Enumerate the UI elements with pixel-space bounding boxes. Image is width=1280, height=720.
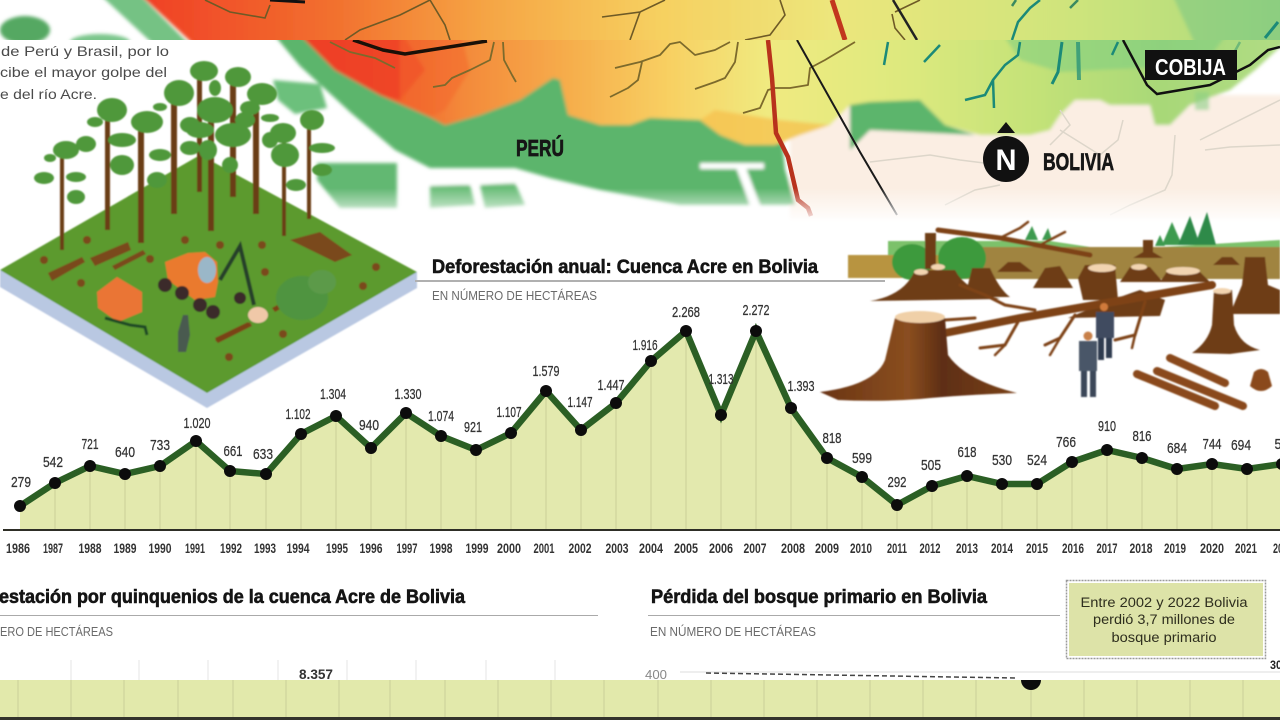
chart value labels: 684	[1167, 440, 1187, 457]
panel gridlines	[71, 660, 555, 680]
intro text block: e del río Acre.	[0, 86, 97, 102]
chart value labels: 910	[1098, 418, 1116, 435]
point fragment	[1021, 680, 1041, 690]
chart value labels: 599	[852, 450, 872, 467]
chart year axis labels: 1995	[326, 540, 348, 556]
chart year axis labels: 1999	[466, 540, 489, 556]
chart value labels: 1.074	[428, 408, 454, 425]
distant vegetation	[888, 212, 1280, 262]
chart line	[20, 331, 1280, 506]
panel subtitle: EN NÚMERO DE HECTÁREAS	[650, 624, 816, 639]
map teal streams	[884, 42, 1240, 108]
chart value labels: 1.447	[598, 377, 624, 394]
log pile	[1137, 358, 1243, 406]
big stump	[820, 311, 1017, 401]
bottom band: chart fragment	[0, 680, 1280, 720]
chart year axis labels: 1986	[6, 540, 30, 556]
chart year axis labels: 2020	[1200, 540, 1224, 556]
chart value labels: 633	[253, 446, 273, 463]
harvester machine	[158, 246, 254, 319]
chart year axis labels: 2003	[606, 540, 629, 556]
chart value labels: 940	[359, 417, 379, 434]
chart value labels	[11, 302, 1280, 491]
chart year axis labels: 1988	[78, 540, 102, 556]
chart value labels: 721	[82, 436, 98, 453]
chart year axis labels: 2007	[744, 540, 767, 556]
chart year axis labels: 1990	[148, 540, 172, 556]
felled tree	[215, 270, 336, 343]
chart year axis labels: 1992	[220, 540, 242, 556]
chart value labels: 766	[1056, 434, 1076, 451]
panel heading: Pérdida del bosque primario en Bolivia	[651, 587, 987, 608]
chart year axis labels: 1987	[43, 540, 63, 556]
chart year axis labels: 2005	[674, 540, 698, 556]
callout	[1066, 580, 1266, 658]
chart value labels: 1.579	[532, 363, 560, 380]
stumps and logs	[40, 232, 380, 361]
chart year axis labels: 2021	[1235, 540, 1257, 556]
chart value labels: 1.102	[286, 406, 310, 423]
chart value labels: 1.304	[320, 386, 346, 403]
chart value labels: 542	[43, 454, 63, 471]
map strip at top	[0, 0, 1280, 40]
chart value labels: 733	[150, 437, 170, 454]
chart value labels: 921	[464, 419, 482, 436]
map rivers	[330, 42, 855, 113]
worker	[178, 315, 190, 352]
map diagonal black border	[797, 40, 897, 215]
chart value labels: 1.330	[394, 386, 422, 403]
rear stumps	[870, 233, 1280, 354]
stump tops	[914, 264, 1231, 294]
map Bolivian rivers	[870, 100, 1280, 215]
chart year axis labels: 1996	[360, 540, 383, 556]
chart year axis labels: 2011	[887, 540, 907, 556]
person 2	[1079, 332, 1097, 397]
chart year axis labels: 2008	[781, 540, 805, 556]
chart: annual deforestation	[3, 257, 1280, 556]
intro text block	[0, 43, 169, 102]
ground band	[960, 247, 1280, 279]
chart year axis labels: 2004	[639, 540, 663, 556]
panel subtitle: ERO DE HECTÁREAS	[0, 624, 113, 639]
plot ground	[0, 155, 417, 393]
chart value labels: 1.393	[788, 378, 814, 395]
bar value: 8.357	[299, 666, 333, 682]
chart value labels: 744	[1202, 436, 1222, 453]
intro text block: cibe el mayor golpe del	[0, 64, 167, 80]
chart value labels: 2.268	[672, 304, 700, 321]
chart gridlines	[55, 331, 1247, 530]
panel: primary forest loss	[645, 587, 1280, 682]
callout: perdió 3,7 millones de	[1093, 612, 1235, 627]
chart value labels: 530	[992, 452, 1012, 469]
chart value labels: 524	[1027, 452, 1047, 469]
chart value labels: 818	[822, 430, 842, 447]
chart year axis labels: 2018	[1130, 540, 1153, 556]
map black thick road	[353, 40, 487, 54]
chart value labels: 1.916	[632, 337, 658, 354]
chart year axis labels: 1989	[114, 540, 137, 556]
panel heading: estación por quinquenios de la cuenca Acre de Bolivia	[0, 587, 465, 608]
trailer	[97, 277, 147, 335]
icon: north compass	[983, 122, 1029, 182]
chart year axis labels: 2009	[815, 540, 839, 556]
axis value: 400	[645, 667, 667, 682]
chart year axis labels: 2010	[850, 540, 872, 556]
illustration: logging plot	[0, 61, 417, 408]
chart year axis labels: 2012	[920, 540, 941, 556]
band gridlines	[18, 680, 1243, 717]
chart value labels: 1.313	[708, 371, 734, 388]
map red border	[768, 40, 811, 216]
chart year axis labels: 1998	[430, 540, 453, 556]
chart value labels: 292	[888, 474, 906, 491]
chart year axis labels: 2013	[956, 540, 978, 556]
chart area	[20, 331, 1280, 530]
fallen tree trunks	[938, 222, 1212, 355]
chart year axis labels: 2006	[709, 540, 733, 556]
callout: bosque primario	[1112, 630, 1216, 645]
intro text block: de Perú y Brasil, por lo	[1, 43, 169, 59]
chart year axis labels: 1991	[185, 540, 205, 556]
tree crowns	[34, 61, 335, 204]
chart axis	[3, 529, 1280, 531]
chart year axis labels: 2015	[1026, 540, 1048, 556]
chart points	[14, 325, 1280, 512]
panel: five-year deforestation	[0, 587, 598, 682]
icon: north compass: N	[996, 144, 1016, 177]
chart value labels: 505	[921, 457, 941, 474]
map Cobija road	[1123, 40, 1280, 94]
chart year axis labels: 2017	[1096, 540, 1118, 556]
map terrain	[271, 40, 1280, 217]
chart value labels: 694	[1231, 437, 1251, 454]
label: Bolivia: BOLIVIA	[1043, 149, 1114, 176]
chart value labels: 2.272	[742, 302, 770, 319]
chart year axis labels: 2001	[534, 540, 555, 556]
chart year axis labels: 2002	[568, 540, 592, 556]
map panel: topographic map of the Acre basin	[0, 0, 1280, 224]
label: Cobija: COBIJA	[1155, 54, 1226, 80]
chart year axis labels	[6, 540, 1280, 556]
dashed line	[706, 673, 1015, 678]
chart year axis labels: 1993	[254, 540, 276, 556]
person 1	[1096, 303, 1114, 360]
chart year axis labels: 1994	[286, 540, 310, 556]
chart value labels: 1.107	[496, 404, 522, 421]
chart year axis labels: 2000	[497, 540, 521, 556]
chart subtitle: EN NÚMERO DE HECTÁREAS	[432, 288, 597, 303]
chart year axis labels: 2014	[991, 540, 1013, 556]
bushes	[892, 237, 986, 280]
chart year axis labels: 2019	[1164, 540, 1186, 556]
plot base	[0, 270, 417, 408]
chart value labels: 816	[1132, 428, 1152, 445]
strip rivers	[205, 0, 920, 40]
chart value labels: 279	[11, 474, 31, 491]
chart value labels: 661	[224, 443, 242, 460]
chart value labels: 1.147	[568, 394, 592, 411]
illustration: deforested landscape	[820, 212, 1280, 406]
chart heading: Deforestación anual: Cuenca Acre en Bolivia	[432, 257, 818, 278]
strip thick road and borders	[270, 0, 305, 2]
chart value labels: 1.020	[184, 415, 210, 432]
chart year axis labels: 1997	[396, 540, 418, 556]
reference line	[680, 671, 1280, 673]
chart value labels: 640	[115, 444, 135, 461]
chart year axis labels: 2016	[1062, 540, 1084, 556]
map bottom fade	[327, 190, 1280, 220]
label: Peru: PERÚ	[516, 134, 564, 161]
small stump	[1250, 369, 1272, 391]
trees	[60, 73, 311, 250]
callout: Entre 2002 y 2022 Bolivia	[1080, 595, 1248, 610]
chart value labels: 618	[958, 444, 976, 461]
